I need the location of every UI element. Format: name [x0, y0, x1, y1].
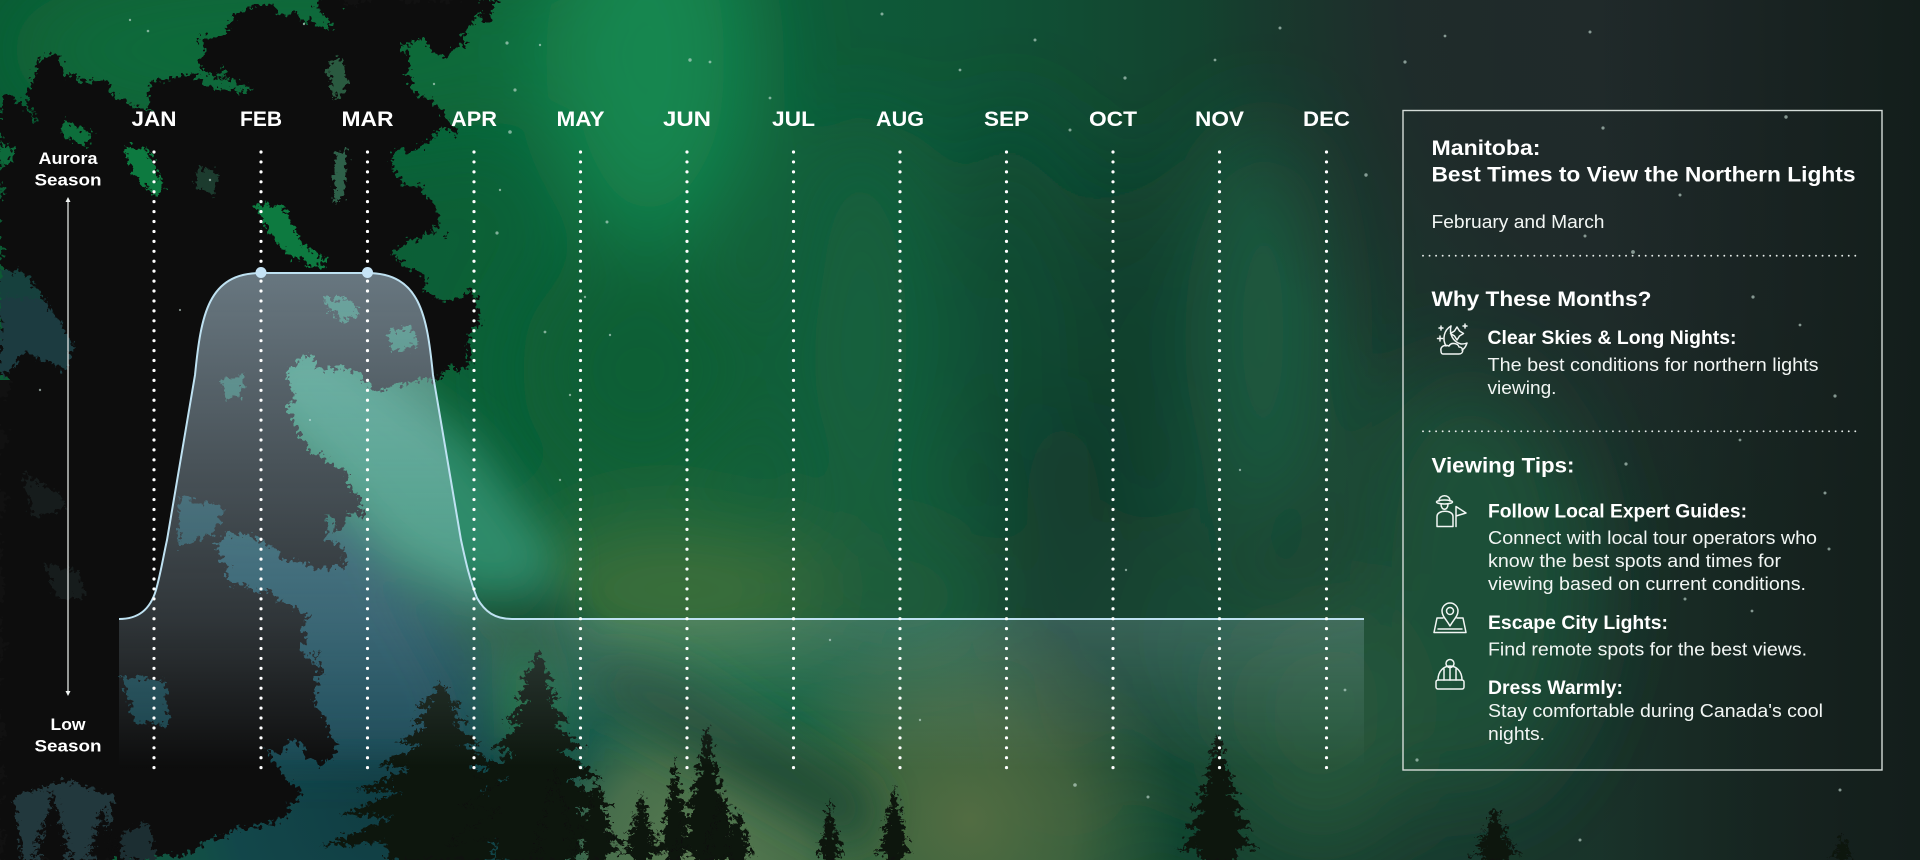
season curve with area fill [119, 273, 1364, 770]
month labels: APR [451, 107, 497, 131]
tip: dress warmly [1488, 678, 1823, 744]
month labels: OCT [1089, 107, 1137, 131]
heading: viewing tips: Viewing Tips: [1432, 454, 1574, 478]
tip: escape city lights: Find remote spots for the best views. [1488, 638, 1807, 660]
month labels: MAR [342, 107, 394, 131]
tip: dress warmly: Stay comfortable during Canada's cool [1488, 700, 1823, 721]
tip: local expert guides: know the best spots and times for [1488, 550, 1781, 571]
panel: best times and viewing tips [1403, 110, 1882, 770]
month labels: DEC [1303, 107, 1350, 131]
tip: escape city lights [1488, 613, 1807, 660]
month labels [132, 107, 1350, 131]
month labels: JUL [772, 107, 815, 131]
month labels: JUN [663, 107, 711, 131]
tip: clear skies and long nights [1488, 328, 1818, 398]
month labels: AUG [876, 107, 924, 131]
y axis: aurora season to low season: Aurora [38, 149, 98, 168]
tip: clear skies and long nights: Clear Skies & Long Nights: [1488, 328, 1736, 349]
heading: why these months: Why These Months? [1432, 287, 1652, 311]
icon: winter hat [1436, 660, 1464, 689]
y axis: aurora season to low season: Low [50, 715, 86, 734]
large foreground tree, left [0, 0, 490, 860]
heading: title [1432, 136, 1856, 186]
y axis: aurora season to low season: Season [34, 736, 102, 756]
tip: clear skies and long nights: viewing. [1488, 377, 1556, 398]
heading: title: Manitoba: [1432, 136, 1540, 160]
foreground fir trees, bottom [320, 648, 1854, 860]
icon: map pin [1434, 603, 1466, 632]
tip: escape city lights: Escape City Lights: [1488, 613, 1668, 634]
heading: title: Best Times to View the Northern Lights [1432, 162, 1856, 186]
tip: local expert guides [1488, 502, 1817, 594]
tip: dress warmly: Dress Warmly: [1488, 678, 1623, 699]
peak markers: February and March [256, 267, 373, 278]
icon: local guide with hat and flag [1436, 496, 1466, 526]
y axis: aurora season to low season [34, 149, 102, 756]
text: best months: February and March [1432, 211, 1604, 232]
tip: clear skies and long nights: The best conditions for northern lights [1488, 354, 1818, 375]
tip: local expert guides: Follow Local Expert Guides: [1488, 502, 1747, 522]
y axis: aurora season to low season: Season [34, 170, 102, 190]
month labels: JAN [132, 107, 176, 131]
icon: moon, stars and cloud [1438, 324, 1467, 354]
month labels: SEP [984, 107, 1029, 131]
month labels: FEB [240, 107, 282, 131]
tip: local expert guides: Connect with local tour operators who [1488, 527, 1817, 548]
month labels: NOV [1195, 107, 1245, 131]
tip: dress warmly: nights. [1488, 723, 1545, 744]
month gridlines [154, 152, 1326, 768]
month labels: MAY [556, 107, 604, 131]
tip: local expert guides: viewing based on current conditions. [1488, 573, 1806, 594]
